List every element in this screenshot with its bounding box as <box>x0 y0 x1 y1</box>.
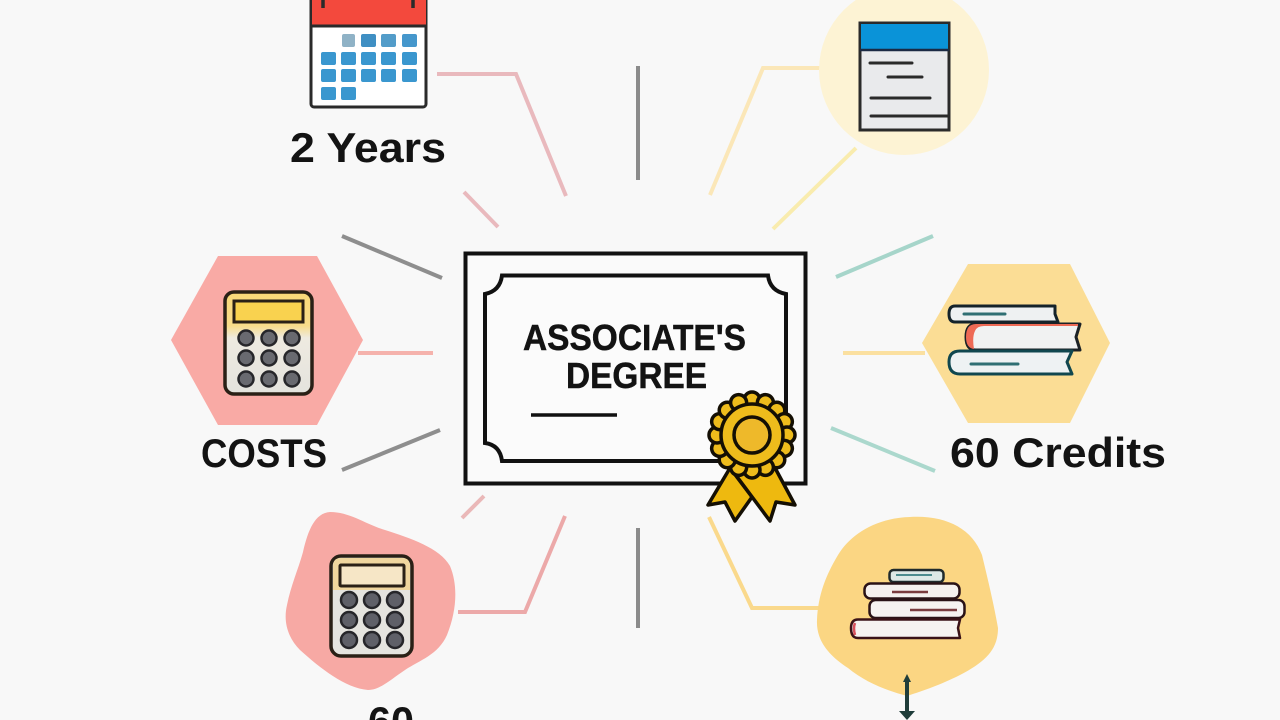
heading: certificate title: DEGREE <box>566 355 707 396</box>
panel: costs hexagon with calculator <box>171 256 363 425</box>
icon: rosette seal <box>708 392 795 521</box>
heading: certificate title: ASSOCIATE'S <box>523 317 746 358</box>
icon: calendar <box>311 0 426 107</box>
label: 60 Credits: 60 Credits <box>950 429 1166 476</box>
panel: credits hexagon with books <box>922 264 1110 423</box>
arrow: bottom-right vertical <box>899 674 915 720</box>
panel: bottom-right blob with books <box>817 517 998 696</box>
label: 2 Years: 2 Years <box>290 124 446 171</box>
connector lines <box>342 66 935 628</box>
label: COSTS: COSTS <box>201 432 327 476</box>
heading: certificate title <box>523 317 746 396</box>
icon: document in pale circle <box>819 0 989 155</box>
certificate <box>466 254 806 484</box>
panel: bottom-left blob with calculator <box>286 512 455 690</box>
